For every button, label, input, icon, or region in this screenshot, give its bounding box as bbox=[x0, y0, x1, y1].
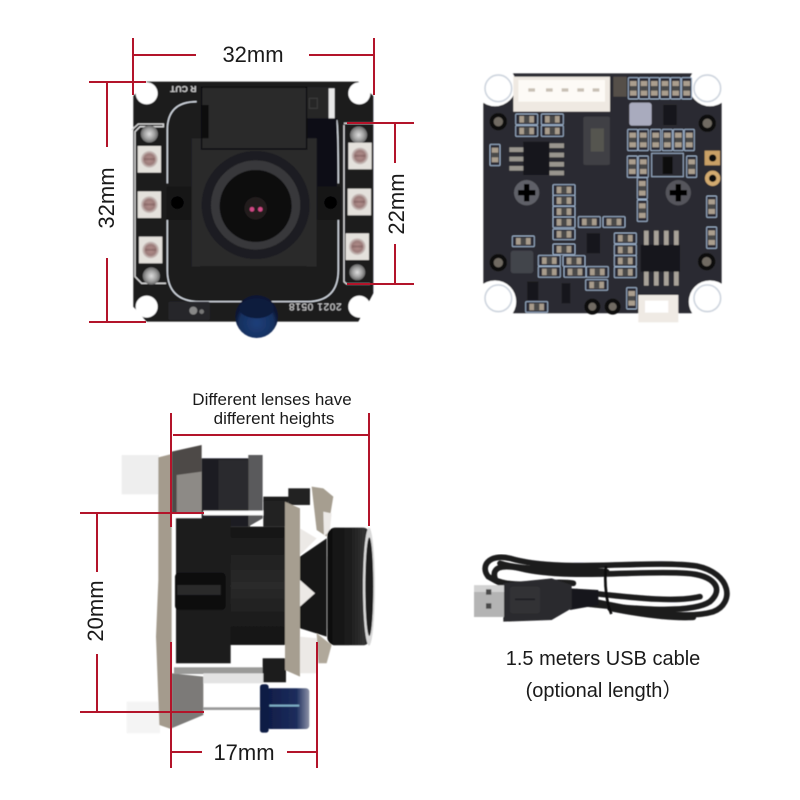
dimension: lens height bbox=[173, 390, 369, 526]
left LED strip bbox=[132, 124, 166, 285]
connectors on rear bbox=[122, 455, 160, 733]
dimension: height 32mm bbox=[89, 82, 146, 322]
mounting holes bbox=[480, 70, 725, 317]
photo: camera side bbox=[122, 445, 375, 733]
lens bbox=[327, 528, 375, 646]
white gap bbox=[203, 511, 263, 515]
board bbox=[483, 73, 722, 313]
panel: USB cable bbox=[474, 557, 727, 702]
blue capacitor bbox=[235, 295, 278, 338]
panel: back view of camera board bbox=[480, 70, 725, 322]
small white connector bbox=[638, 295, 678, 322]
silkscreen text: IR CUT: R CUT bbox=[169, 84, 197, 94]
IR-cut filter block bbox=[307, 87, 337, 190]
right LED strip bbox=[344, 123, 373, 284]
side rails and small blocks bbox=[174, 488, 310, 683]
photo: front of PCB bbox=[132, 82, 373, 338]
panel: side view of camera bbox=[80, 390, 375, 768]
silkscreen outline bbox=[167, 102, 338, 302]
dimension: lens height: Different lenses have bbox=[192, 390, 352, 409]
dimension: height 20mm: 20mm bbox=[83, 580, 108, 642]
date code: 2021 0518 bbox=[288, 301, 342, 312]
screws bbox=[514, 180, 691, 205]
dimension: depth 17mm bbox=[171, 413, 317, 768]
board outline bbox=[133, 82, 373, 322]
caption: 1.5 meters USB cable bbox=[506, 648, 700, 670]
lens holder bbox=[175, 518, 231, 663]
lens holder body bbox=[167, 138, 341, 284]
caption: (optional length） bbox=[526, 679, 682, 702]
thread bbox=[300, 538, 327, 637]
SMD components bbox=[490, 78, 717, 312]
solder spots bbox=[168, 302, 210, 320]
panel: front view of camera board bbox=[89, 38, 414, 338]
inductors bbox=[511, 103, 652, 273]
dimension: width 32mm: 32mm bbox=[222, 42, 284, 67]
strain relief bbox=[570, 588, 598, 610]
caption bbox=[506, 648, 700, 702]
dimension: LED spacing 22mm: 22mm bbox=[384, 173, 409, 235]
plug body bbox=[503, 578, 572, 622]
mounting holes bbox=[136, 82, 370, 318]
rear components bbox=[172, 445, 203, 728]
cable loops bbox=[485, 557, 727, 618]
dimension: width 32mm bbox=[133, 38, 374, 95]
top holder block bbox=[202, 87, 307, 149]
white cable connector bbox=[513, 77, 627, 112]
dimension: depth 17mm: 17mm bbox=[213, 740, 275, 765]
lens barrel bbox=[230, 527, 285, 645]
rear PCB edge bbox=[156, 454, 172, 729]
dimension: lens height: different heights bbox=[214, 409, 334, 428]
gold pads bbox=[705, 151, 720, 186]
metal USB plug bbox=[474, 585, 504, 617]
solder joints bbox=[492, 115, 714, 313]
IC chips bbox=[509, 105, 683, 303]
dimension: height 20mm bbox=[80, 513, 204, 712]
lens bbox=[202, 151, 310, 259]
dimension: height 32mm: 32mm bbox=[94, 167, 119, 229]
IR-cut block bbox=[202, 455, 263, 527]
cable tie bbox=[605, 566, 611, 614]
blue capacitor and wire bbox=[203, 684, 309, 733]
dimension: LED spacing 22mm bbox=[347, 123, 414, 284]
photo: coiled USB cable bbox=[474, 557, 727, 622]
front PCB edge bbox=[285, 487, 333, 677]
